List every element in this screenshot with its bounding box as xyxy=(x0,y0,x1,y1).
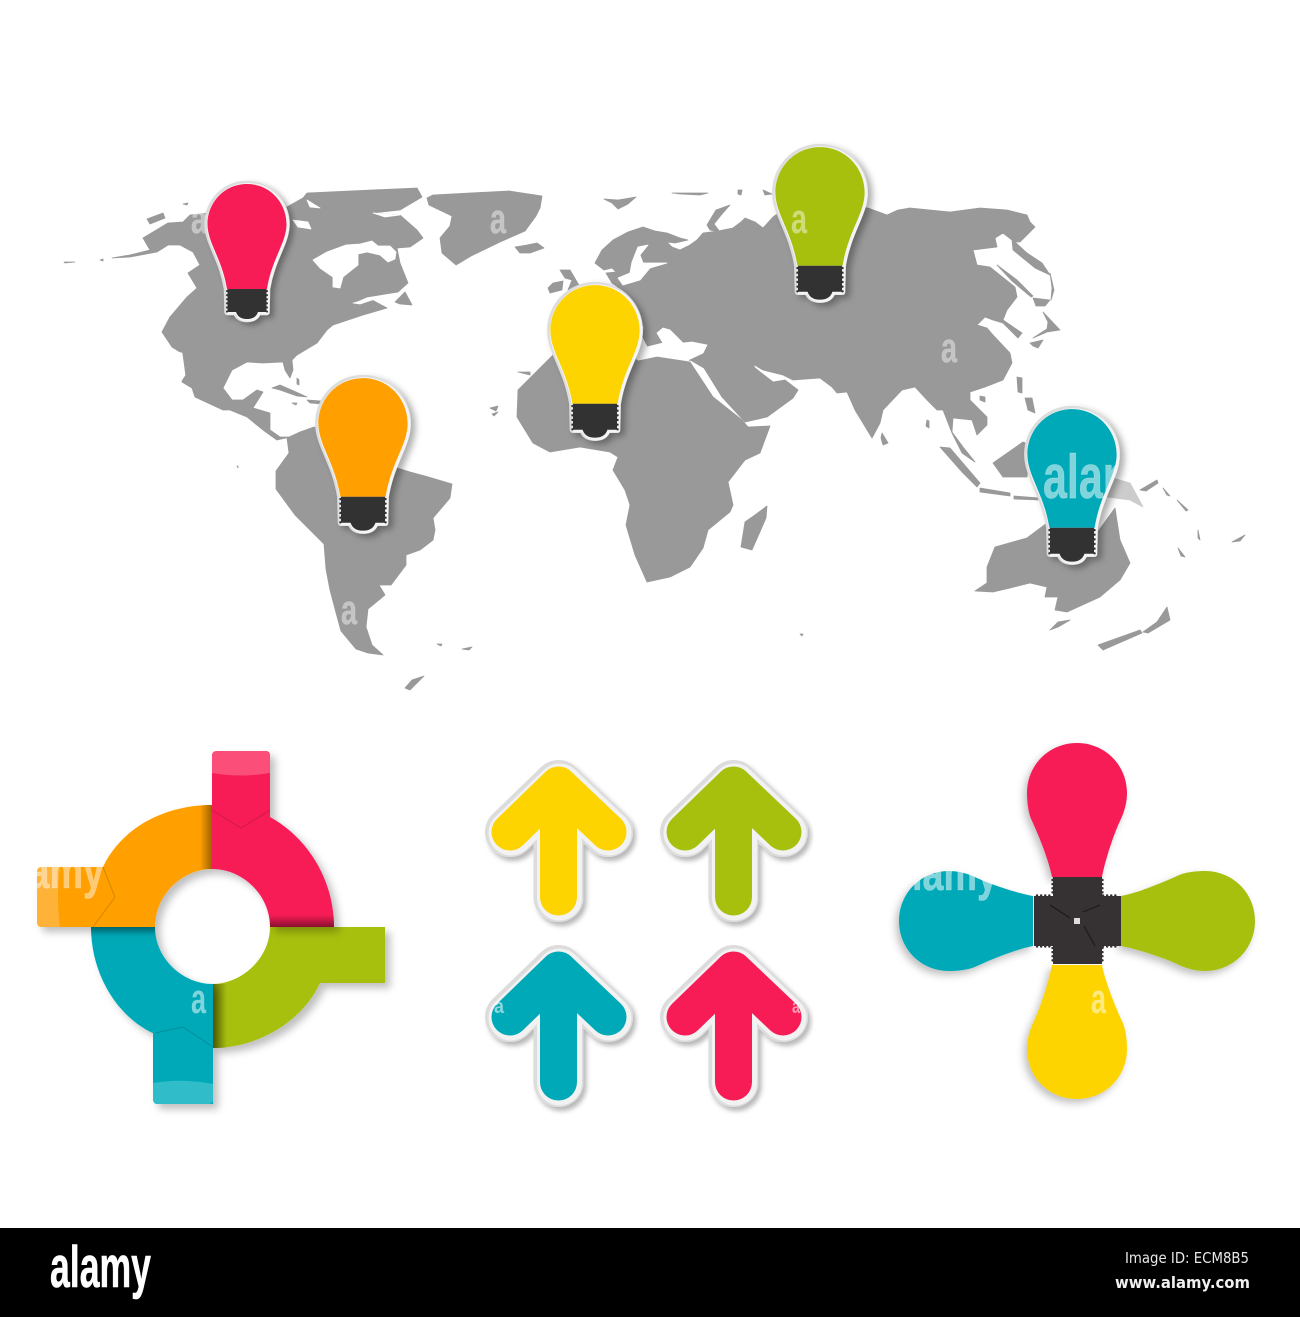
watermark letters on the map: a xyxy=(941,324,957,371)
footer url: www.alamy.com xyxy=(1115,1273,1250,1292)
icon: orange light bulb over South America xyxy=(318,378,409,532)
Baltic and Mediterranean seas xyxy=(618,245,707,363)
arrow: pink xyxy=(685,970,784,1083)
arrow: teal xyxy=(510,970,609,1083)
Sri Lanka and Southeast Asia islands xyxy=(881,398,1040,500)
clover petal: yellow bottom xyxy=(1027,965,1127,1099)
watermark on teal quadrant: a xyxy=(191,975,206,1022)
British Isles and North Atlantic islands xyxy=(490,190,772,416)
icon: teal light bulb over Indonesia xyxy=(1027,409,1118,563)
Newfoundland and islands around North America xyxy=(64,203,412,405)
watermark on teal bulb: alamy xyxy=(1043,443,1165,512)
watermark specks on arrows: a xyxy=(792,996,801,1018)
fold shadows between quadrants xyxy=(91,805,334,1048)
watermark on orange tab: lamy xyxy=(18,843,104,899)
teal quadrant with lower tab xyxy=(91,927,213,1104)
icon: red light bulb over North America xyxy=(208,184,288,320)
green quadrant with right tab xyxy=(212,927,385,1048)
inland water of Canada and Baja xyxy=(313,241,396,288)
North America xyxy=(112,188,423,440)
Sakhalin and northeast Asian islands xyxy=(980,265,1060,402)
watermark on green bulb: a xyxy=(791,195,807,242)
clover petal: green right xyxy=(1121,871,1255,971)
four-bulb clover diagram xyxy=(899,743,1255,1099)
Tasmania and New Zealand xyxy=(1050,607,1170,650)
orange quadrant with left tab xyxy=(37,805,212,927)
South Atlantic and Antarctic islands xyxy=(237,466,803,690)
teal tab light band xyxy=(153,1081,213,1104)
footer bar xyxy=(0,1228,1300,1317)
arrow group xyxy=(510,785,784,1083)
chevron folds xyxy=(93,810,270,1047)
watermark specks on arrows xyxy=(494,996,801,1018)
Iceland xyxy=(515,243,544,253)
Africa xyxy=(517,351,770,582)
clover dark hub xyxy=(1034,877,1121,964)
watermark letters on the map: a xyxy=(341,586,357,633)
arrow: green xyxy=(685,785,784,898)
image id: Image ID: ECM8B5 xyxy=(1125,1249,1249,1267)
pink tab light band xyxy=(212,751,270,776)
icon: yellow light bulb over West Africa xyxy=(550,285,641,439)
Pacific islands xyxy=(1140,480,1245,557)
watermark letters on the map xyxy=(191,195,957,633)
South America xyxy=(276,427,452,655)
watermark on clover yellow petal: a xyxy=(1091,975,1106,1022)
pink quadrant with upper tab xyxy=(212,751,334,927)
circular four-part diagram xyxy=(18,751,385,1104)
watermark letters on the map: a xyxy=(490,195,506,242)
Greenland xyxy=(427,191,542,265)
Madagascar xyxy=(741,506,767,550)
watermark letters on the map: a xyxy=(191,195,207,242)
footer logo: alamy xyxy=(50,1235,151,1300)
clover petal: teal left xyxy=(899,871,1033,971)
New Guinea, faded under watermark xyxy=(1107,478,1143,507)
arrow: yellow xyxy=(510,785,609,898)
Australia xyxy=(975,508,1130,612)
watermark specks on arrows: a xyxy=(494,996,505,1018)
clover petal: pink top xyxy=(1027,743,1127,877)
watermark on clover teal petal: lamy xyxy=(912,845,998,901)
orange tab light band xyxy=(37,867,60,927)
world map xyxy=(64,188,1245,690)
icon: green light bulb over Russia xyxy=(775,147,866,301)
Eurasia xyxy=(595,205,1050,462)
